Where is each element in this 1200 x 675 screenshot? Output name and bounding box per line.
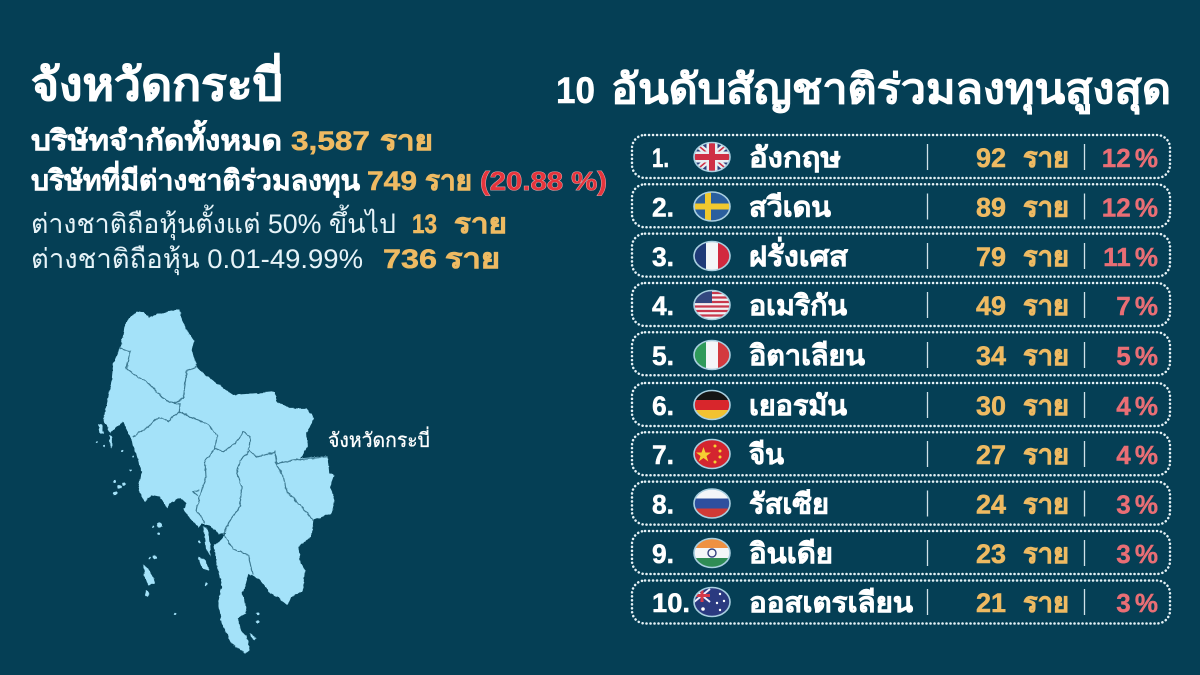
map landmass and islands [96,309,335,654]
row 5: Italy: ราย [1023,340,1069,371]
row 4: USA: 7 % [1116,291,1158,321]
stat line: companies with foreign investors [31,160,607,198]
row 8: Russia [632,482,1170,525]
row 10: Australia: 10. [652,588,690,618]
row 10: Australia: ราย [1023,587,1069,618]
row 6: Germany: 4 % [1116,391,1158,421]
row 1: England [632,135,1170,178]
flag: USA [694,290,730,320]
row 6: Germany: 30 [976,391,1006,421]
flag: Russia [694,488,730,518]
row 2: Sweden: 89 [976,192,1006,222]
row 9: India: ราย [1023,538,1069,569]
row 7: China: 7. [652,440,674,470]
row 9: India: 3 % [1116,539,1158,569]
stat line: foreign holding 0.01-49.99 percent [31,243,500,276]
row 1: England: 92 [976,143,1006,173]
stat line: foreign holding 0.01-49.99 percent: ราย [445,243,500,274]
row 5: Italy: อิตาเลียน [749,340,865,371]
row 7: China: จีน [748,439,784,470]
row 8: Russia: ราย [1023,488,1069,520]
row 3: France [632,234,1170,277]
row 3: France: 3. [652,242,674,272]
row 6: Germany [632,383,1170,426]
map: district borders [119,347,327,575]
ranking table [632,135,1170,624]
row 3: France: ฝรั่งเศส [749,236,849,272]
row 10: Australia: 3 % [1116,588,1158,618]
map: Krabi province [96,309,335,654]
flag: Australia [694,587,730,617]
row 5: Italy [632,332,1170,375]
flag: Italy [694,340,730,370]
row 1: England: 12 % [1102,143,1158,173]
right heading: top 10 nationalities: อันดับสัญชาติร่วมลงทุนสูงสุด [611,66,1171,115]
row 2: Sweden [632,184,1170,227]
row 2: Sweden: 2. [652,192,674,222]
stat line: total limited companies [31,119,433,156]
row 9: India: 23 [976,539,1006,569]
flag: Germany [694,390,730,420]
row 4: USA [632,283,1170,326]
stat line: foreign holding 0.01-49.99 percent: 736 [383,244,437,274]
flag: UK [694,142,730,172]
left heading: province title: จังหวัดกระบี่ [31,53,283,110]
stat line: foreign holding 50 percent or more: ต่างชาติถือหุ้นตั้งแต่ 50% ขึ้นไป [31,204,396,241]
row 3: France: 11 % [1103,242,1158,272]
flag: Sweden [694,192,730,222]
row 8: Russia: รัสเซีย [749,488,829,520]
stat line: total limited companies: 3,587 [291,126,370,156]
row 7: China: ราย [1023,439,1069,470]
flag: China [694,439,730,469]
map label: จังหวัดกระบี่ [328,426,430,452]
row 7: China: 4 % [1116,440,1158,470]
row 7: China [632,432,1170,475]
row 2: Sweden: 12 % [1102,192,1158,222]
row 1: England: อังกฤษ [749,142,841,173]
row 1: England: 1. [652,143,669,173]
row 5: Italy: 5 % [1116,341,1158,371]
text block: company statistics [31,119,607,276]
row 4: USA: ราย [1023,290,1069,321]
row 9: India [632,531,1170,574]
row 5: Italy: 34 [976,341,1006,371]
row 5: Italy: 5. [652,341,674,371]
stat line: companies with foreign investors: ราย [425,165,472,196]
stat line: foreign holding 50 percent or more [31,204,507,241]
stat line: companies with foreign investors: (20.88 %) [480,166,607,196]
row 6: Germany: 6. [652,391,674,421]
stat line: companies with foreign investors: บริษัทที่มีต่างชาติร่วมลงทุน [31,160,360,198]
row 4: USA: อเมริกัน [749,290,847,321]
row 6: Germany: ราย [1023,390,1069,421]
row 3: France: 79 [976,242,1006,272]
row 10: Australia: 21 [976,588,1006,618]
row 2: Sweden: สวีเดน [749,192,831,222]
row 2: Sweden: ราย [1023,192,1069,222]
row 9: India: 9. [652,539,674,569]
row 10: Australia: ออสเตรเลียน [749,587,913,618]
row 8: Russia: 8. [652,490,674,520]
stat line: foreign holding 50 percent or more: 13 [412,209,437,239]
row 6: Germany: เยอรมัน [749,390,847,421]
stat line: foreign holding 0.01-49.99 percent: ต่างชาติถือหุ้น 0.01-49.99% [31,244,363,276]
stat line: foreign holding 50 percent or more: ราย [454,208,507,239]
right heading: top 10 nationalities: 10 [556,70,595,111]
row 9: India: อินเดีย [749,538,833,569]
stat line: total limited companies: บริษัทจำกัดทั้งหมด [31,119,282,156]
row 3: France: ราย [1023,241,1069,272]
stat line: total limited companies: ราย [380,125,433,156]
flag: France [694,241,730,271]
flag: India [694,538,730,568]
row 4: USA: 49 [976,291,1006,321]
row 1: England: ราย [1023,142,1069,173]
row 4: USA: 4. [652,291,674,321]
stat line: companies with foreign investors: 749 [367,166,417,196]
row 10: Australia [632,580,1170,624]
row 7: China: 27 [976,440,1006,470]
row 8: Russia: 3 % [1116,490,1158,520]
row 8: Russia: 24 [976,490,1006,520]
